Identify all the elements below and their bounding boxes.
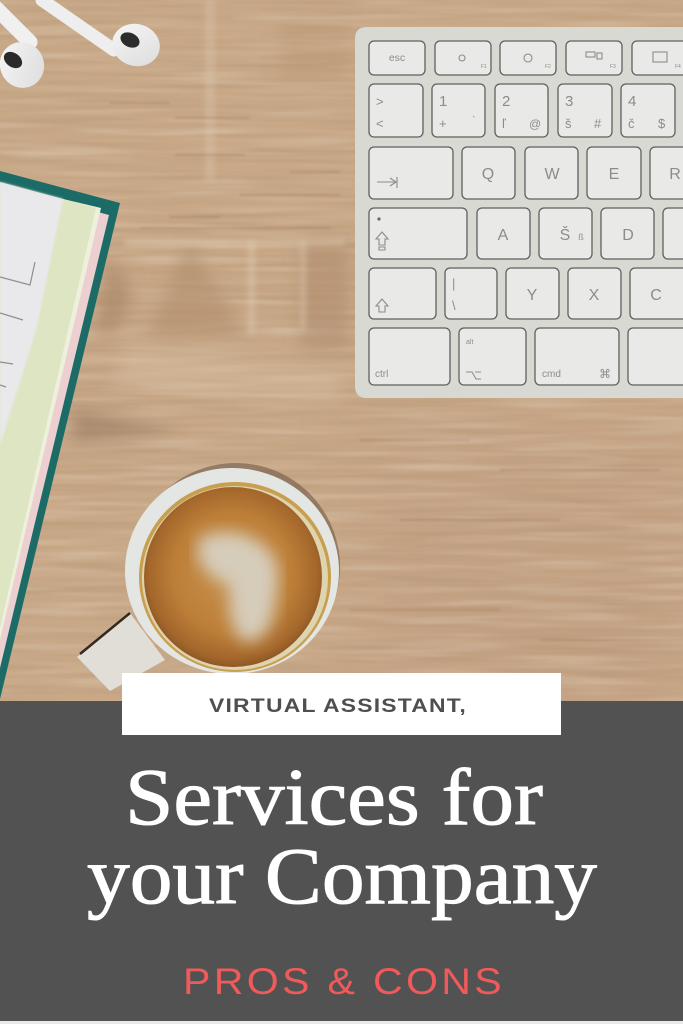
green page block [0, 182, 96, 628]
ASDF key row: Š [560, 225, 570, 244]
notebook cover [0, 171, 120, 699]
function key row: F2 [545, 64, 551, 70]
subtitle text: VIRTUAL ASSISTANT, [209, 696, 467, 717]
cup shadow [132, 463, 340, 671]
QWERTY key row: R [669, 166, 681, 183]
bottom modifier key row: cmd [542, 369, 561, 380]
function key row [369, 41, 683, 75]
function key row: F3 [610, 64, 616, 70]
function key row: F1 [481, 64, 487, 70]
number key row: # [594, 116, 602, 131]
white page [0, 182, 63, 445]
dark title panel [0, 701, 683, 1021]
title line 2: your Company [87, 833, 597, 921]
main title [87, 754, 597, 921]
bottom modifier key row: alt [466, 339, 473, 346]
title line 1: Services for [125, 754, 543, 842]
number key row: č [628, 116, 635, 131]
ZXCV key row: C [650, 287, 662, 304]
ZXCV key row: Y [527, 287, 538, 304]
number key row: 1 [439, 93, 447, 110]
coffee crema ring [139, 482, 331, 672]
function key row: esc [389, 52, 405, 64]
ZXCV key row [369, 268, 683, 319]
function key row: F4 [675, 64, 681, 70]
notebook ruled marks [0, 262, 35, 387]
QWERTY key row: W [544, 166, 560, 183]
bottom modifier key row: ctrl [375, 369, 388, 380]
QWERTY key row [369, 147, 683, 199]
pink page edge [0, 186, 109, 668]
QWERTY key row: Q [482, 166, 494, 183]
coffee surface [144, 487, 322, 667]
ASDF key row: D [622, 227, 634, 244]
number key row: 4 [628, 93, 636, 110]
ZXCV key row: \ [452, 298, 456, 313]
subtitle box [122, 673, 561, 735]
coffee cup [77, 463, 340, 691]
earbuds [0, 0, 165, 95]
notebook [0, 171, 120, 699]
icon: left earbud [0, 8, 52, 95]
number key row [369, 84, 683, 137]
icon: right earbud [42, 0, 165, 71]
number key row: @ [529, 117, 541, 131]
number key row: ` [472, 115, 476, 127]
bottom modifier key row: ⌘ [599, 367, 611, 381]
cup handle [77, 613, 165, 691]
number key row: 2 [502, 93, 510, 110]
QWERTY key row: E [609, 166, 619, 183]
cup rim [125, 468, 339, 674]
keyboard [355, 27, 683, 398]
number key row: š [565, 116, 572, 131]
ZXCV key row: | [452, 276, 455, 291]
number key row: > [376, 94, 384, 109]
ASDF key row: ß [578, 232, 584, 242]
latte foam [197, 532, 278, 642]
ASDF key row [369, 208, 683, 259]
bottom modifier key row [369, 328, 683, 385]
number key row: + [439, 116, 447, 131]
keyboard body [355, 27, 683, 398]
number key row: $ [658, 116, 666, 131]
wood desk background [0, 0, 683, 710]
number key row: 3 [565, 93, 573, 110]
ASDF key row: A [498, 227, 509, 244]
number key row: ľ [502, 116, 506, 131]
ZXCV key row: X [589, 287, 600, 304]
pros and cons tagline: PROS & CONS [183, 961, 505, 1002]
white page edge [0, 184, 101, 640]
number key row: < [376, 116, 384, 131]
